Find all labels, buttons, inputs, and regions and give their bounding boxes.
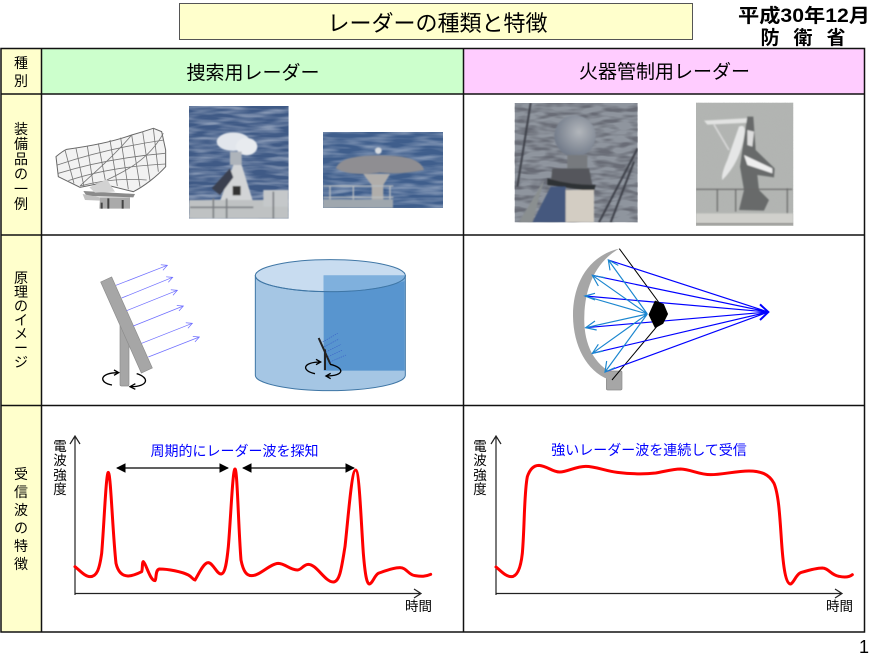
date and ministry (738, 4, 870, 49)
page number: 1 (859, 637, 869, 657)
y axis label: 波 (473, 453, 487, 468)
photo: search radar on ship mast (189, 106, 289, 219)
heading: search radar: 捜索用レーダー (186, 62, 320, 84)
heading: fire control radar: 火器管制用レーダー (579, 61, 750, 83)
row label: equipment examples: 例 (14, 196, 28, 212)
chart: continuous received wave (473, 436, 853, 614)
row label: received wave characteristics: 徴 (14, 556, 28, 572)
y axis label: 強 (53, 468, 67, 483)
row label: received wave characteristics: 受 (14, 466, 28, 482)
beam arrows (116, 265, 199, 357)
y axis label: 度 (53, 482, 67, 497)
row label: equipment examples: 一 (14, 181, 28, 197)
row label: principle image: イ (14, 312, 28, 328)
x axis label: 時間 (826, 599, 853, 614)
row label: equipment examples: 品 (14, 151, 28, 167)
red signal line (75, 469, 431, 584)
photo: fire control radar dome (515, 103, 638, 222)
row label: principle image: 原 (14, 270, 28, 286)
diagram: rotating search antenna with beams (101, 265, 199, 389)
row label: principle image: ー (14, 340, 28, 356)
row label: received wave characteristics: 特 (14, 538, 28, 554)
date and ministry: 防衛省 (760, 27, 846, 49)
title box: レーダーの種類と特徴 (327, 11, 548, 36)
row label: received wave characteristics: の (14, 520, 28, 536)
y axis label: 電 (473, 439, 487, 454)
y axis label: 度 (473, 482, 487, 497)
x axis label: 時間 (405, 599, 432, 614)
chart annotation: 強いレーダー波を連続して受信 (551, 442, 747, 458)
row label: received wave characteristics: 波 (14, 502, 28, 518)
photo: fire control radar dish (696, 103, 793, 226)
y axis label: 強 (473, 468, 487, 483)
row label: equipment examples: の (14, 166, 28, 182)
photo: wireframe search radar antenna (56, 128, 166, 209)
row label: principle image: ジ (14, 354, 28, 370)
row label: received wave characteristics: 信 (14, 484, 28, 500)
date and ministry: 平成30年12月 (738, 4, 870, 27)
diagram: cylinder coverage volume (255, 260, 405, 391)
row label: principle image: メ (14, 326, 28, 342)
row label: type: 種 (14, 55, 28, 71)
axes (491, 436, 842, 598)
period arrows (117, 467, 354, 469)
diagram: parabolic fire control antenna (573, 249, 768, 390)
axes (70, 436, 421, 598)
row label: principle image: 理 (14, 284, 28, 300)
row label: equipment examples: 備 (14, 136, 28, 152)
row label: principle image: の (14, 298, 28, 314)
red signal line (496, 465, 852, 584)
chart: periodic received wave (53, 436, 432, 614)
y axis label: 波 (53, 453, 67, 468)
photo: search radar flat antenna (323, 132, 443, 208)
chart annotation: 周期的にレーダー波を探知 (150, 443, 318, 459)
row label: equipment examples: 装 (14, 121, 28, 137)
y axis label: 電 (53, 439, 67, 454)
row label: type: 別 (14, 73, 28, 89)
title box (180, 4, 692, 40)
